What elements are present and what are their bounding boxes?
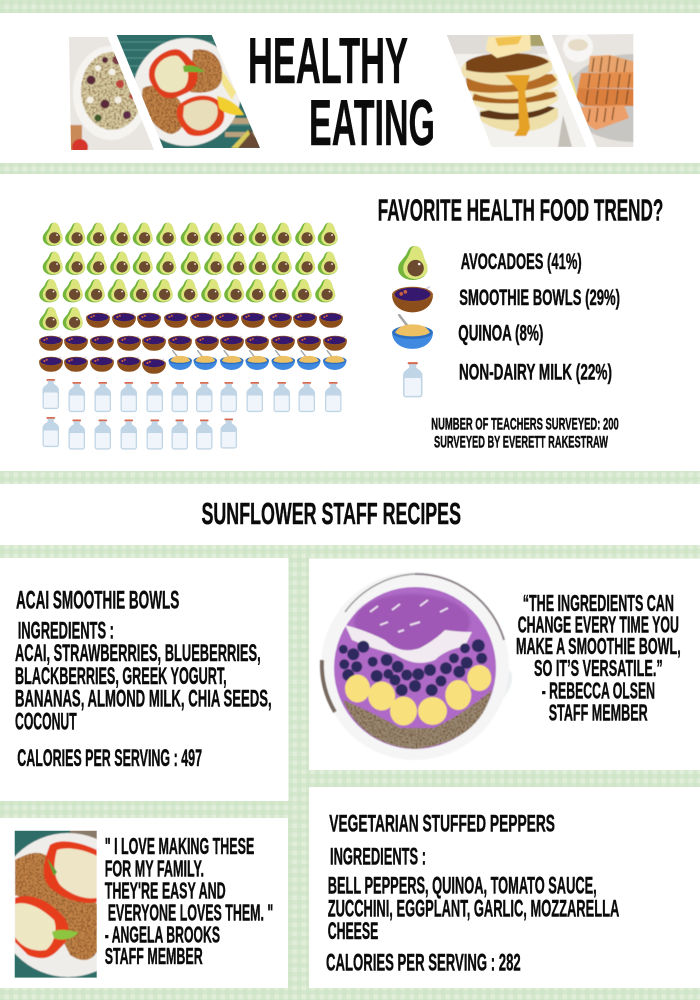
icon: avocado xyxy=(398,246,428,280)
chia seed band xyxy=(343,690,492,749)
coconut specks xyxy=(370,600,448,632)
panel: acai recipe xyxy=(0,558,288,801)
peppers quote: EVERYONE LOVES THEM. " xyxy=(108,900,273,926)
blueberries xyxy=(339,639,487,696)
pictogram: survey results xyxy=(39,223,347,450)
peppers recipe text xyxy=(326,811,619,977)
milk bottle row 7 xyxy=(42,379,342,412)
panel: peppers quote xyxy=(0,818,288,988)
photo: grain bowl xyxy=(69,37,154,150)
photo: pancake stack xyxy=(446,35,586,147)
title: EATING xyxy=(309,86,435,159)
peppers quote: - ANGELA BROOKS xyxy=(105,922,220,948)
ingredients label: INGREDIENTS : xyxy=(330,843,426,870)
smoothie bowl row 5 xyxy=(39,336,347,351)
ingredients list: BLACKBERRIES, GREEK YOGURT, xyxy=(15,663,227,690)
milk bottle row 8 xyxy=(42,417,237,450)
calories: CALORIES PER SERVING : 497 xyxy=(17,745,202,772)
coconut flakes xyxy=(345,625,472,663)
icon: quinoa bowl xyxy=(392,315,433,349)
label: avocadoes: AVOCADOES (41%) xyxy=(461,249,582,274)
panel: peppers recipe xyxy=(309,787,700,988)
avocado row 2 xyxy=(43,252,338,275)
title: HEALTHY xyxy=(248,24,408,97)
photo: acai smoothie bowl xyxy=(321,572,512,760)
ingredients list: COCONUT xyxy=(15,708,77,735)
ingredients list: CHEESE xyxy=(328,918,378,945)
ingredients list: ACAI, STRAWBERRIES, BLUEBERRIES, xyxy=(15,640,261,667)
photo: stuffed pepper close-up xyxy=(14,830,97,978)
banana slices xyxy=(345,665,491,726)
acai recipe text xyxy=(15,586,272,772)
title xyxy=(248,24,435,159)
panel: survey xyxy=(0,174,700,471)
acai quote xyxy=(516,590,681,726)
peppers quote: THEY'RE EASY AND xyxy=(105,877,226,903)
recipe title: ACAI SMOOTHIE BOWLS xyxy=(16,586,179,614)
ingredients list: BANANAS, ALMOND MILK, CHIA SEEDS, xyxy=(15,686,272,713)
ingredients list xyxy=(15,640,272,735)
ingredients list xyxy=(328,872,619,945)
smoothie and quinoa bowl row 6 xyxy=(39,351,346,374)
ingredients label: INGREDIENTS : xyxy=(18,617,114,644)
avocado and smoothie bowl row 4 xyxy=(39,307,343,330)
label: non-dairy milk: NON-DAIRY MILK (22%) xyxy=(459,359,612,384)
legend xyxy=(392,246,620,397)
peppers quote: " I LOVE MAKING THESE xyxy=(105,833,254,859)
photo: stuffed peppers plate xyxy=(116,35,260,148)
survey source note xyxy=(431,414,619,452)
icon: smoothie bowl xyxy=(392,287,433,312)
icon: milk bottle xyxy=(403,362,422,397)
peppers quote: STAFF MEMBER xyxy=(105,943,203,969)
panel: acai quote xyxy=(309,558,700,770)
calories: CALORIES PER SERVING : 282 xyxy=(326,950,521,977)
avocado row 1 xyxy=(43,223,338,246)
label: quinoa: QUINOA (8%) xyxy=(458,321,543,346)
peppers quote: FOR MY FAMILY. xyxy=(105,856,204,882)
panel: recipes heading band xyxy=(0,484,700,545)
heading: sunflower staff recipes: SUNFLOWER STAFF RECIPES xyxy=(202,496,461,531)
spoon xyxy=(490,666,512,706)
peppers quote xyxy=(105,833,273,969)
photo: grilled salmon xyxy=(552,34,634,147)
panel: header xyxy=(0,13,700,163)
avocado row 3 xyxy=(39,279,335,302)
